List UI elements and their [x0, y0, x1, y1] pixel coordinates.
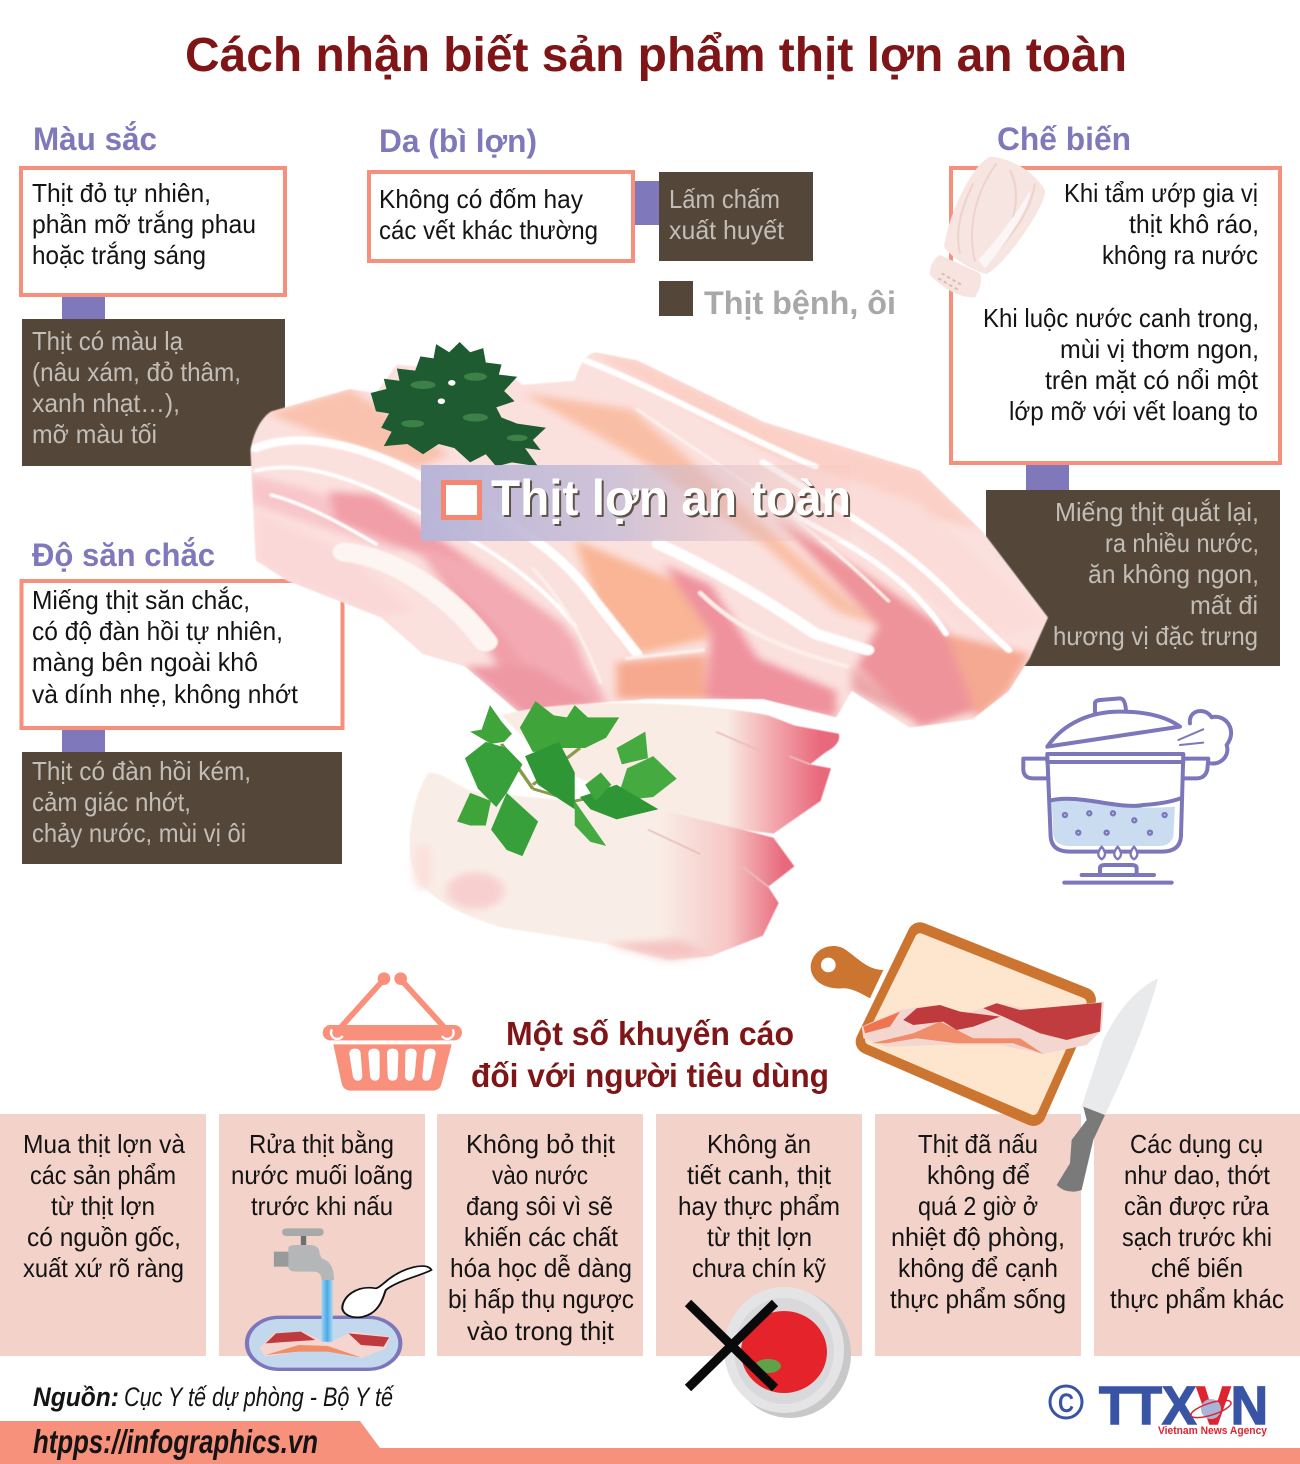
- diseased colour text box: mỡ màu tối: [32, 419, 157, 449]
- connector: [62, 297, 105, 319]
- diseased skin text box: Lấm chấm: [669, 184, 780, 214]
- source: Cục Y tế dự phòng - Bộ Y tế: [124, 1382, 395, 1412]
- diseased colour text box: Thịt có màu lạ: [32, 326, 183, 356]
- diseased processing text box: hương vị đặc trưng: [1053, 621, 1258, 651]
- card 6: chế biến: [1151, 1253, 1243, 1283]
- heading: Chế biến: Chế biến: [997, 121, 1131, 157]
- connector: [635, 181, 659, 225]
- diseased colour text box: (nâu xám, đỏ thâm,: [32, 357, 241, 387]
- icon: crossed-out blood soup bowl: [688, 1287, 851, 1418]
- card 3: vào nước: [492, 1160, 588, 1190]
- image: pig trotters: [410, 703, 839, 960]
- card 2: trước khi nấu: [251, 1191, 393, 1221]
- card 1: [0, 1114, 206, 1356]
- card 4: từ thịt lợn: [707, 1222, 812, 1252]
- icon: dark parsley on pork: [371, 342, 546, 466]
- card 3: vào trong thịt: [467, 1316, 615, 1346]
- logo: TTXVN: C: [1058, 1388, 1074, 1418]
- card 5: thực phẩm sống: [890, 1284, 1066, 1314]
- card 6: sạch trước khi: [1122, 1222, 1272, 1252]
- card 1: xuất xứ rõ ràng: [23, 1253, 184, 1283]
- card 5: không để: [927, 1160, 1030, 1190]
- card 5: Thịt đã nấu: [918, 1129, 1038, 1159]
- label: Thịt lợn an toàn: Thịt lợn an toàn: [491, 470, 851, 526]
- card 4: hay thực phẩm: [678, 1191, 840, 1221]
- card 5: quá 2 giờ ở: [918, 1191, 1038, 1221]
- source: Nguồn:: [33, 1382, 119, 1412]
- panel: Chế biến: [930, 121, 1280, 666]
- card 6: thực phẩm khác: [1110, 1284, 1284, 1314]
- card 5: [875, 1114, 1081, 1356]
- card 2: [219, 1114, 425, 1356]
- connector: [62, 730, 105, 752]
- safe skin text box: [369, 172, 633, 261]
- diseased processing text box: [986, 490, 1280, 666]
- heading: Da (bì lợn): Da (bì lợn): [379, 123, 537, 159]
- card 3: hóa học dễ dàng: [450, 1253, 632, 1283]
- panel: recommendation cards: [0, 1114, 1300, 1356]
- panel: Độ săn chắc (drawn first, meat overlaps): [22, 537, 342, 864]
- icon: cutting board with bacon: [811, 935, 1104, 1113]
- card 6: cần được rửa: [1124, 1191, 1269, 1221]
- section heading: recommendations: Một số khuyến cáo: [506, 1015, 794, 1052]
- image: pork belly slabs: [250, 352, 1048, 728]
- card 1: từ thịt lợn: [51, 1191, 155, 1221]
- safe colour text box: hoặc trắng sáng: [32, 240, 206, 270]
- safe meat text box: có độ đàn hồi tự nhiên,: [32, 616, 283, 646]
- icon: boiling pot: [1023, 698, 1231, 883]
- legend: diseased meat: Thịt bệnh, ôi: [704, 285, 896, 321]
- safe colour text box: phần mỡ trắng phau: [32, 209, 256, 239]
- card 4: Không ăn: [707, 1129, 811, 1159]
- card 1: có nguồn gốc,: [27, 1222, 181, 1252]
- safe processing text box: lớp mỡ với vết loang to: [1009, 396, 1258, 426]
- card 3: khiến các chất: [464, 1222, 619, 1252]
- safe meat text box: màng bên ngoài khô: [32, 647, 258, 677]
- safe processing text box: Khi tẩm ướp gia vị: [1064, 178, 1258, 208]
- logo: TTXVN: TTXVN: [1099, 1376, 1268, 1436]
- heading: Độ săn chắc: Độ săn chắc: [32, 537, 215, 573]
- diseased skin text box: xuất huyết: [669, 215, 785, 245]
- icon: green parsley on trotters: [457, 701, 677, 856]
- card 3: bị hấp thụ ngược: [448, 1284, 634, 1314]
- logo: TTXVN: Vietnam News Agency: [1158, 1425, 1268, 1437]
- diseased processing text box: ăn không ngon,: [1088, 559, 1259, 589]
- panel: Màu sắc: [21, 121, 285, 466]
- safe processing text box: Khi luộc nước canh trong,: [983, 303, 1259, 333]
- icon: knife: [1057, 978, 1158, 1192]
- diseased meat text box: cảm giác nhớt,: [32, 787, 191, 817]
- card 1: các sản phẩm: [30, 1160, 176, 1190]
- section heading: recommendations: [471, 1015, 829, 1094]
- card 4: tiết canh, thịt: [687, 1160, 832, 1190]
- title: Cách nhận biết sản phẩm thịt lợn an toàn: [185, 29, 1127, 82]
- safe meat text box: [22, 581, 342, 728]
- safe meat text box: Miếng thịt săn chắc,: [32, 585, 250, 615]
- card 5: nhiệt độ phòng,: [891, 1222, 1065, 1252]
- diseased colour text box: xanh nhạt…),: [32, 388, 180, 418]
- icon: salt shaker: [930, 157, 1045, 297]
- card 2: nước muối loãng: [231, 1160, 413, 1190]
- safe processing text box: trên mặt có nổi một: [1045, 365, 1259, 395]
- safe processing text box: [951, 168, 1280, 463]
- card 4: [656, 1114, 862, 1356]
- diseased processing text box: Miếng thịt quắt lại,: [1055, 497, 1259, 527]
- diseased processing text box: mất đi: [1190, 590, 1258, 620]
- safe colour text box: [21, 168, 285, 295]
- safe skin text box: các vết khác thường: [379, 215, 598, 245]
- safe processing text box: không ra nước: [1102, 240, 1258, 270]
- source: [33, 1382, 395, 1412]
- card 3: [437, 1114, 643, 1356]
- diseased meat text box: chảy nước, mùi vị ôi: [32, 818, 246, 848]
- diseased meat text box: [22, 752, 342, 864]
- panel: Da (bì lợn): [369, 123, 896, 321]
- safe skin text box: Không có đốm hay: [379, 184, 583, 214]
- card 1: Mua thịt lợn và: [23, 1129, 186, 1159]
- connector: [1026, 465, 1069, 490]
- card 4: chưa chín kỹ: [692, 1253, 826, 1283]
- safe processing text box: thịt khô ráo,: [1129, 209, 1259, 239]
- icon: shopping basket: [323, 972, 462, 1091]
- label: Thịt lợn an toàn: [421, 465, 853, 541]
- card 6: [1094, 1114, 1300, 1356]
- card 3: đang sôi vì sẽ: [466, 1191, 613, 1221]
- diseased colour text box: [22, 319, 285, 466]
- section heading: recommendations: đối với người tiêu dùng: [471, 1057, 829, 1094]
- safe colour text box: Thịt đỏ tự nhiên,: [32, 178, 211, 208]
- label: Thịt lợn an toàn: Thịt lợn an toàn: [493, 472, 853, 528]
- icon: faucet over bowl with bacon: [247, 1228, 431, 1369]
- heading: Màu sắc: Màu sắc: [33, 121, 157, 157]
- diseased skin text box: [659, 172, 813, 261]
- card 3: Không bỏ thịt: [466, 1129, 616, 1159]
- card 5: không để cạnh: [898, 1253, 1058, 1283]
- card 6: như dao, thớt: [1124, 1160, 1271, 1190]
- diseased processing text box: ra nhiều nước,: [1105, 528, 1259, 558]
- safe meat text box: và dính nhẹ, không nhớt: [32, 679, 299, 709]
- footer band with URL: [0, 1421, 1300, 1464]
- diseased meat text box: Thịt có đàn hồi kém,: [32, 756, 251, 786]
- safe processing text box: mùi vị thơm ngon,: [1060, 334, 1259, 364]
- card 6: Các dụng cụ: [1130, 1129, 1263, 1159]
- footer band with URL: htpps://infographics.vn: [33, 1423, 318, 1460]
- card 2: Rửa thịt bằng: [249, 1129, 394, 1159]
